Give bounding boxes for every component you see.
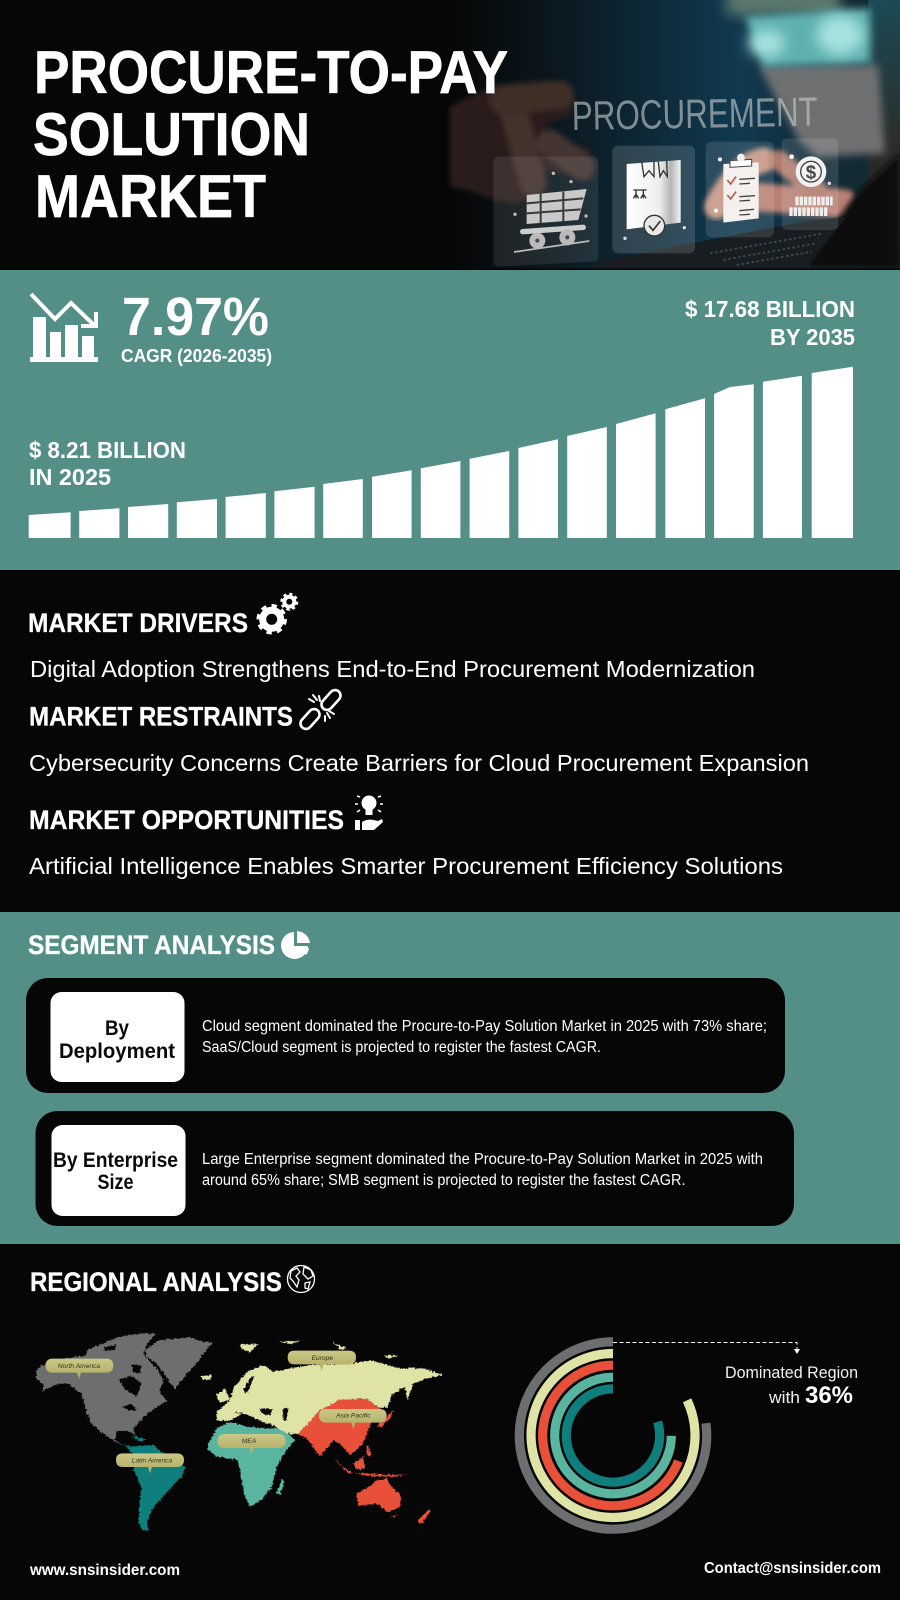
2035 value (685, 296, 855, 350)
callout: dominated region: with (768, 1389, 800, 1407)
label box: by deployment (50, 992, 184, 1082)
radial bar chart (519, 1342, 707, 1529)
2025 value: IN 2025 (29, 464, 111, 490)
label: mea (218, 1434, 286, 1454)
panel: market dynamics (0, 570, 900, 912)
card: by enterprise size (36, 1111, 794, 1226)
callout: dominated region: 36% (805, 1382, 853, 1409)
title (33, 39, 508, 230)
heading: segment analysis: SEGMENT ANALYSIS (28, 930, 275, 960)
label: europe (288, 1351, 356, 1371)
title: MARKET (35, 163, 266, 230)
label box: by enterprise size: Size (98, 1171, 134, 1194)
text: opportunity: Artificial Intelligence Enables Smarter Procurement Efficiency Solutions (29, 853, 783, 879)
region: seas of eurasia (233, 1376, 288, 1427)
label: asia pacific (319, 1409, 387, 1429)
text: enterprise finding: around 65% share; SMB segment is projected to register the fastest CAGR. (202, 1172, 686, 1189)
heading: regional analysis: REGIONAL ANALYSIS (30, 1267, 282, 1297)
footer: Contact@snsinsider.com (704, 1560, 881, 1577)
icon tile: coins (782, 138, 838, 230)
label: north america: North America (58, 1363, 100, 1370)
text: deployment finding (202, 1018, 767, 1056)
icon: pie chart (281, 931, 310, 959)
heading: market drivers: MARKET DRIVERS (28, 608, 248, 638)
card: by deployment (26, 978, 785, 1093)
text: deployment finding: Cloud segment dominated the Procure-to-Pay Solution Market in 2025 with 73% share; (202, 1018, 767, 1035)
arrow: dashed leader (613, 1342, 800, 1354)
region: north america (36, 1333, 213, 1446)
title: PROCURE-TO-PAY (34, 39, 508, 106)
icon: idea in hand (355, 796, 383, 830)
photo text: PROCUREMENT: PROCUREMENT (571, 89, 818, 139)
hand on keyboard (717, 160, 843, 207)
keyboard (597, 217, 847, 268)
text: driver: Digital Adoption Strengthens End-to-End Procurement Modernization (30, 656, 755, 682)
2025 value (29, 437, 186, 490)
heading: market restraints: MARKET RESTRAINTS (29, 702, 293, 732)
icon: globe (288, 1266, 314, 1292)
CAGR value: CAGR (2026-2035) (121, 346, 272, 366)
2035 value: BY 2035 (770, 324, 855, 350)
callout: dominated region: Dominated Region (725, 1364, 858, 1382)
region: middle east and africa (208, 1422, 295, 1507)
callout: dominated region (725, 1364, 858, 1409)
bar chart: market growth (29, 367, 853, 538)
region: latin america (121, 1436, 185, 1531)
2035 value: $ 17.68 BILLION (685, 296, 855, 322)
icon tile: coins: $ (806, 161, 817, 182)
text: enterprise finding: Large Enterprise segment dominated the Procure-to-Pay Solution Market in 2025 with (202, 1151, 763, 1168)
footer: www.snsinsider.com (29, 1562, 180, 1579)
icon: broken link (298, 688, 343, 731)
panel: market size (0, 270, 900, 570)
panel: regional analysis (30, 1266, 858, 1531)
region: asia pacific (298, 1398, 431, 1523)
footer (29, 1560, 881, 1579)
region: north america inland water (103, 1345, 142, 1410)
icon: declining chart (30, 294, 98, 362)
label: latin america: Latin America (132, 1458, 173, 1465)
text: enterprise finding (202, 1151, 763, 1189)
header photo: procurement dashboard (450, 0, 900, 268)
icon tile: cart (493, 157, 598, 267)
label: asia pacific: Asia Pacific (335, 1413, 371, 1420)
world map (36, 1333, 443, 1531)
text: restraint: Cybersecurity Concerns Create Barriers for Cloud Procurement Expansion (29, 750, 809, 776)
map regions (36, 1333, 443, 1531)
label box: by deployment: By (105, 1017, 129, 1040)
label box: by enterprise size (52, 1125, 186, 1216)
icon tile: clipboard (706, 142, 774, 237)
2025 value: $ 8.21 BILLION (29, 437, 186, 463)
hand near cart (450, 80, 593, 203)
icon tile: package (612, 146, 695, 253)
text: deployment finding: SaaS/Cloud segment is projected to register the fastest CAGR. (202, 1039, 601, 1056)
label: north america (46, 1359, 113, 1379)
heading: market opportunities: MARKET OPPORTUNITIES (29, 805, 344, 835)
label box: by deployment: Deployment (59, 1040, 175, 1063)
label box: by enterprise size: By Enterprise (53, 1149, 178, 1172)
label: mea: MEA (242, 1438, 257, 1445)
title: SOLUTION (33, 101, 310, 168)
panel: header (0, 0, 900, 270)
region: europe and russia (200, 1341, 443, 1434)
panel: segment analysis (0, 912, 900, 1244)
label: europe: Europe (312, 1355, 333, 1362)
icon: gears (258, 594, 297, 633)
label: latin america (116, 1453, 184, 1474)
CAGR value: 7.97% (122, 287, 269, 347)
